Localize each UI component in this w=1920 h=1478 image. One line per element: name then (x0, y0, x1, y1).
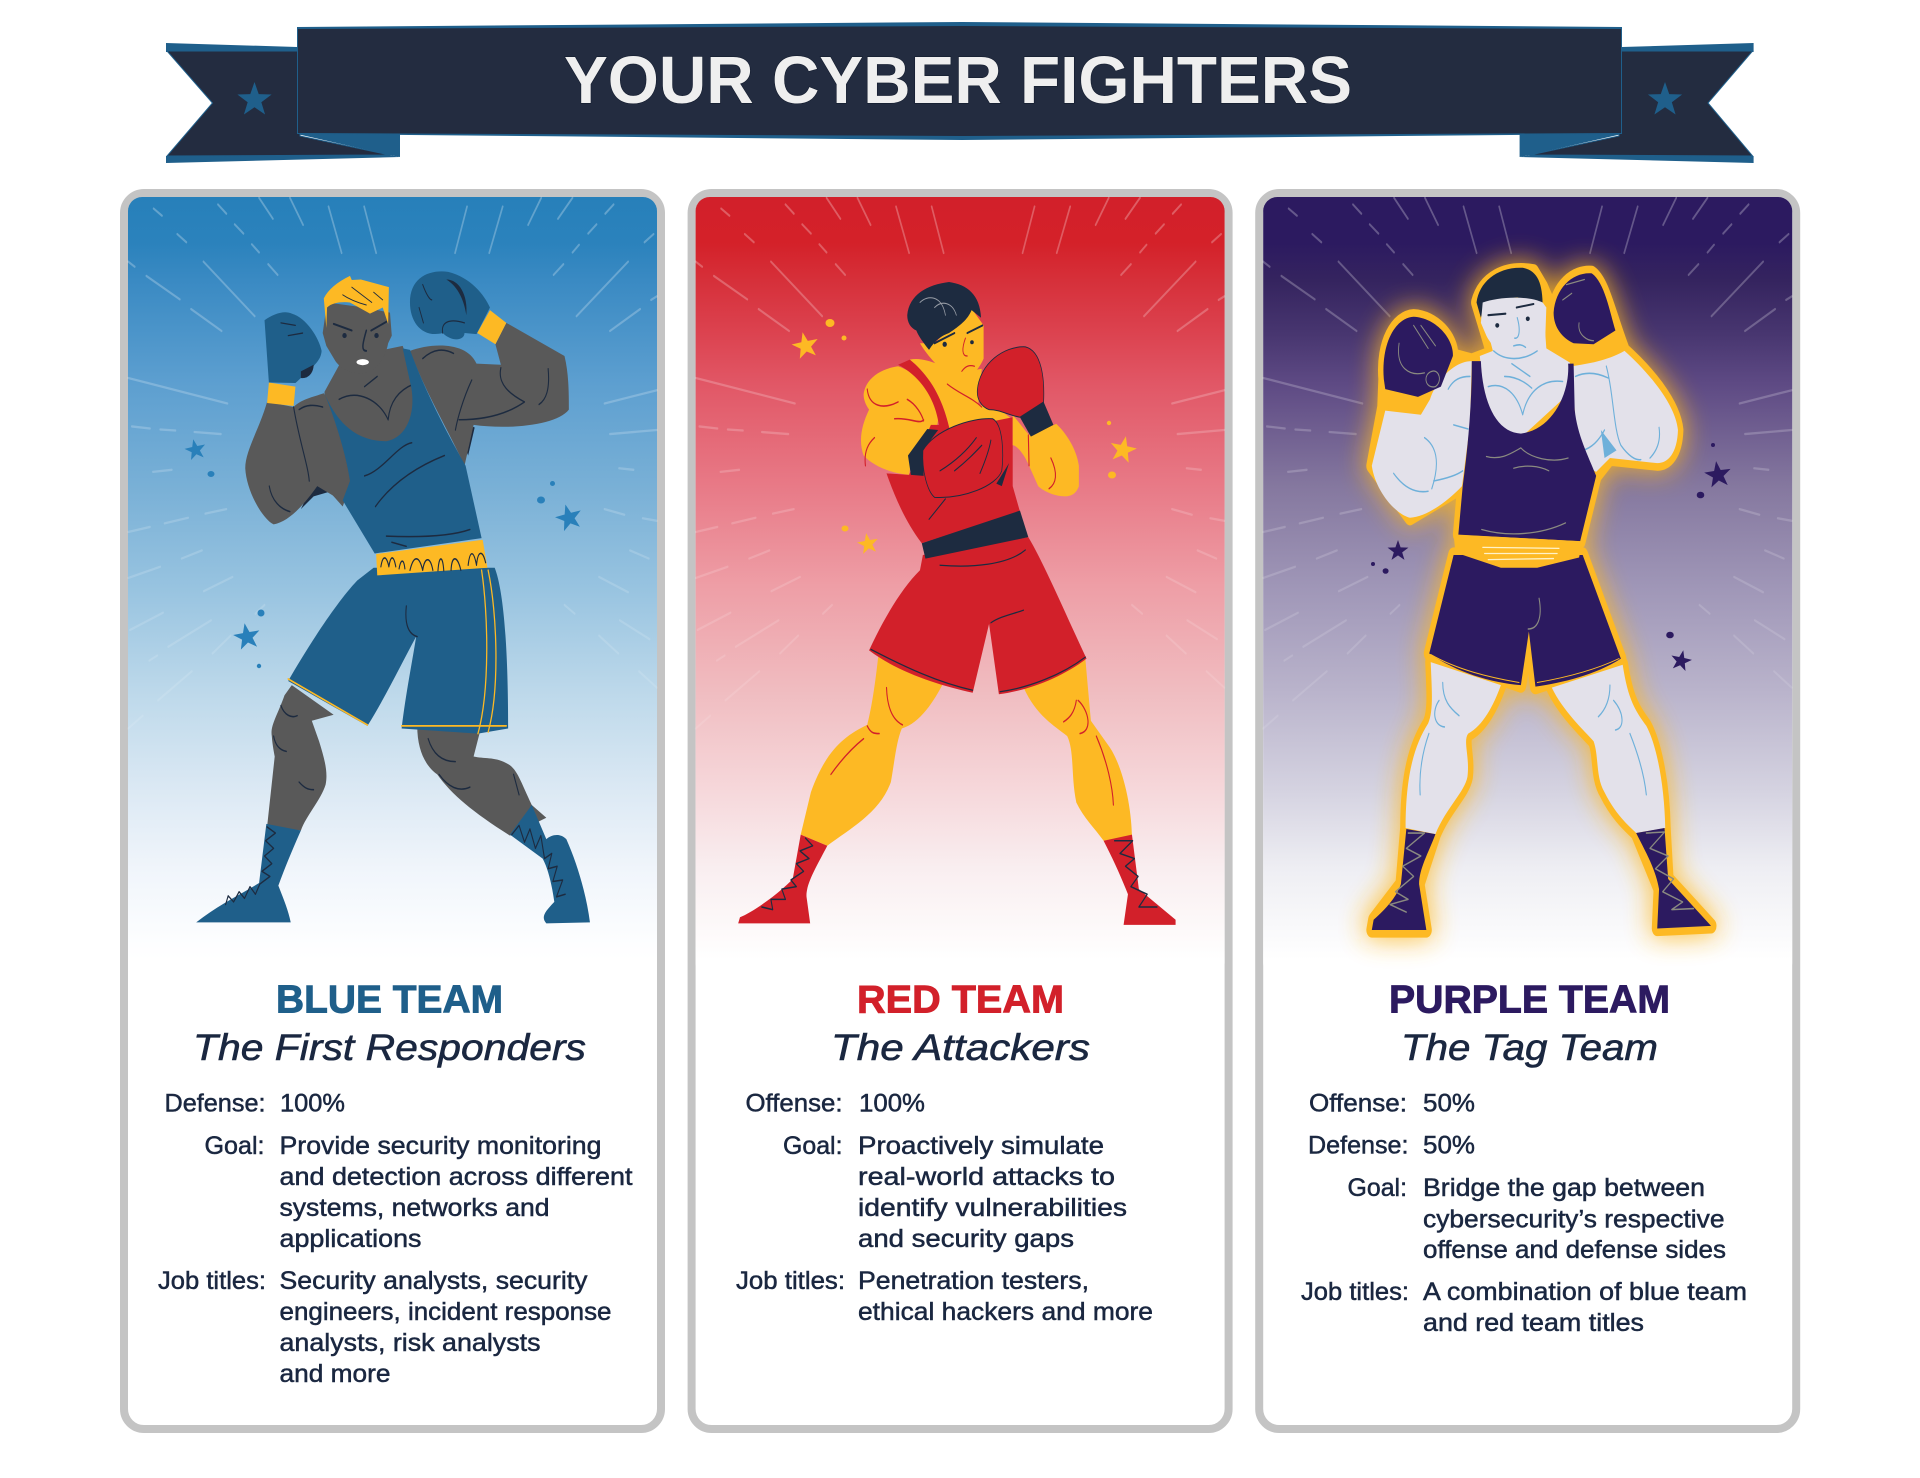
blue team subtitle: The First Responders (193, 1027, 586, 1068)
red team details: Penetration testers, (858, 1267, 1089, 1295)
right arm (1572, 351, 1678, 472)
blue team details: systems, networks and (280, 1194, 550, 1222)
belt (1454, 535, 1583, 568)
red team details: identify vulnerabilities (858, 1194, 1127, 1222)
chest (910, 359, 1013, 430)
title: YOUR CYBER FIGHTERS (564, 43, 1352, 118)
red stars (790, 319, 1139, 555)
head (1477, 268, 1543, 318)
legs (801, 657, 944, 846)
purple team details: 50% (1423, 1132, 1475, 1160)
left glove (265, 312, 322, 383)
tank top (1458, 361, 1596, 541)
red team details: Offense: (746, 1090, 842, 1118)
purple team details: cybersecurity’s respective (1423, 1206, 1724, 1234)
shorts (1429, 555, 1621, 687)
blue team heading: BLUE TEAM (276, 979, 503, 1022)
boots (196, 824, 301, 922)
red panel background (696, 197, 1225, 977)
legs (1406, 662, 1501, 834)
legs (267, 685, 334, 831)
banner (166, 22, 1754, 163)
boxer gold outline (1372, 271, 1711, 930)
red team details (736, 1090, 1153, 1326)
purple stars (1371, 443, 1733, 672)
left arm (861, 366, 938, 475)
chest and neck (1480, 333, 1570, 438)
red team heading: RED TEAM (857, 979, 1064, 1022)
purple team details: Offense: (1309, 1090, 1407, 1118)
purple team details: and red team titles (1423, 1309, 1644, 1337)
upper glove (977, 347, 1044, 417)
purple team details (1301, 1090, 1747, 1337)
boxer glow (1372, 271, 1711, 930)
purple team heading: PURPLE TEAM (1389, 979, 1670, 1022)
left glove (1383, 317, 1453, 397)
red team details: Job titles: (736, 1267, 845, 1295)
blue team details: Job titles: (158, 1267, 266, 1295)
blue team details: Goal: (204, 1132, 264, 1160)
shorts (288, 568, 508, 734)
purple team details: offense and defense sides (1423, 1236, 1726, 1264)
blue team details: 100% (280, 1090, 345, 1118)
red team details: and security gaps (858, 1225, 1074, 1253)
red team details: Proactively simulate (858, 1132, 1104, 1160)
red team details: ethical hackers and more (858, 1298, 1153, 1326)
purple team details: 50% (1423, 1090, 1475, 1118)
blue team details: applications (280, 1225, 422, 1253)
red team details: real-world attacks to (858, 1163, 1115, 1191)
arms and torso (325, 346, 419, 507)
red team details: 100% (859, 1090, 925, 1118)
panel: red team (692, 193, 1229, 1429)
banner left tail (166, 43, 400, 163)
panel: blue team (124, 193, 661, 1429)
blue panel background (128, 197, 657, 977)
purple team subtitle: The Tag Team (1401, 1027, 1658, 1068)
blue boxer (196, 271, 590, 923)
banner ribbon (297, 22, 1622, 140)
right arm (1013, 415, 1079, 496)
tank top (324, 348, 482, 553)
panel: purple team (1259, 193, 1796, 1429)
purple panel background (1263, 197, 1792, 977)
boots (738, 835, 827, 923)
belt (922, 511, 1028, 559)
blue team details: Defense: (164, 1090, 266, 1118)
purple team details: Goal: (1348, 1174, 1407, 1202)
red team subtitle: The Attackers (831, 1027, 1090, 1068)
banner right tail (1520, 43, 1754, 163)
head (323, 302, 392, 373)
belt (376, 540, 487, 575)
blue team details (158, 1090, 633, 1388)
red boxer (738, 282, 1176, 925)
purple team details: Bridge the gap between (1423, 1174, 1705, 1202)
blue team details: analysts, risk analysts (280, 1329, 540, 1357)
head (920, 308, 984, 382)
purple team details: A combination of blue team (1423, 1278, 1747, 1306)
icon: left star (237, 82, 272, 115)
blue team details: Security analysts, security (280, 1267, 588, 1295)
blue team details: Provide security monitoring (280, 1132, 602, 1160)
lower glove (908, 429, 1009, 486)
left arm (1372, 361, 1472, 518)
right glove (410, 271, 490, 339)
blue team details: and more (280, 1360, 390, 1388)
right glove (1554, 273, 1615, 344)
purple team details: Defense: (1308, 1132, 1408, 1160)
shorts (869, 537, 1087, 694)
blue stars (183, 437, 585, 668)
tank top (887, 360, 1020, 543)
blue team details: and detection across different (280, 1163, 633, 1191)
blue team details: engineers, incident response (280, 1298, 612, 1326)
purple boxer (1372, 268, 1711, 930)
red team details: Goal: (783, 1132, 842, 1160)
boots (1372, 829, 1435, 930)
purple team details: Job titles: (1301, 1278, 1409, 1306)
icon: right star (1648, 82, 1682, 115)
